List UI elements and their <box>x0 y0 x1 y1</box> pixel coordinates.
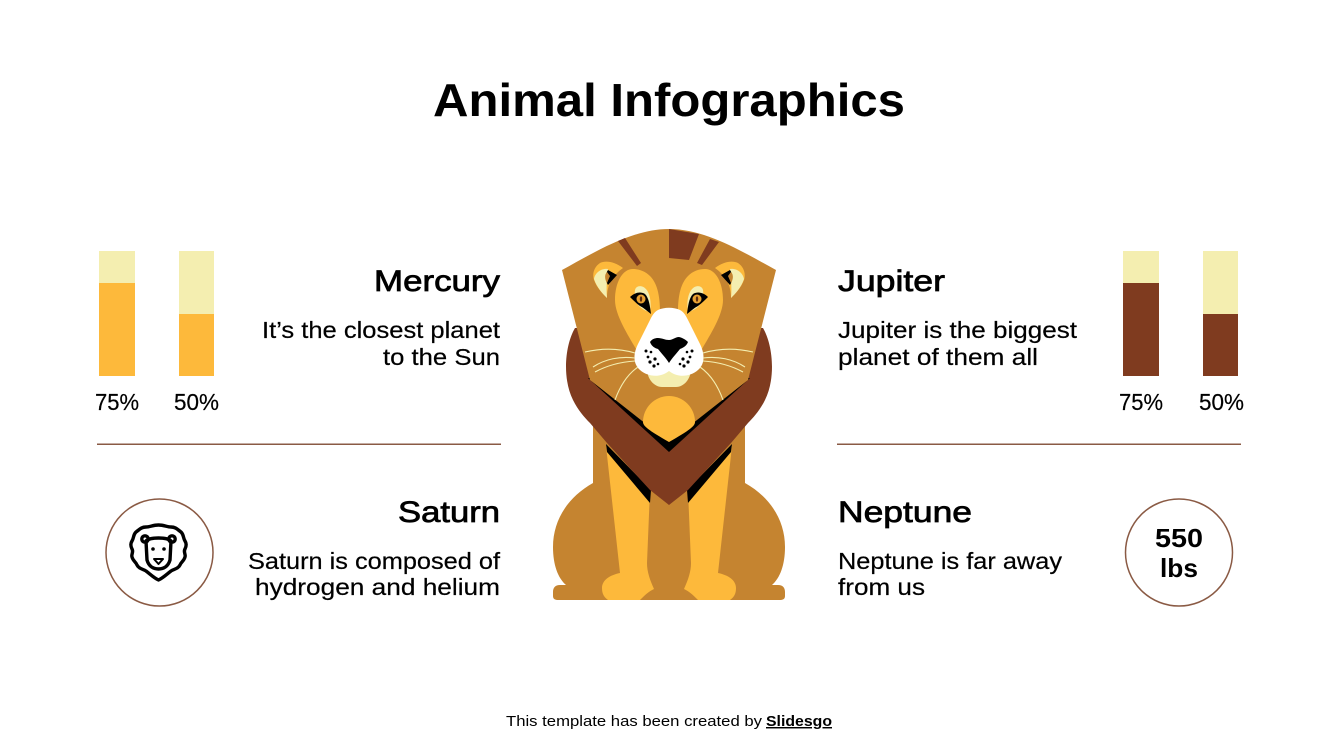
panel: neptune text: Neptune <box>838 496 972 529</box>
panel: neptune weight circle <box>1126 499 1232 606</box>
nose <box>650 337 688 363</box>
icon: lion head outline <box>131 525 186 580</box>
panel: neptune text: Neptune is far away <box>838 548 1063 574</box>
panel: mercury text: to the Sun <box>383 344 500 370</box>
chin <box>647 366 691 387</box>
panel: neptune text <box>838 496 1063 600</box>
right leg <box>684 446 736 600</box>
panel: jupiter bar charts: 75% <box>1119 389 1163 415</box>
panel: neptune weight circle: lbs <box>1160 553 1198 583</box>
panel: mercury bar charts: 75% <box>95 389 139 415</box>
mane stripes <box>618 229 719 266</box>
eye patches <box>635 286 703 312</box>
footer credit: Slidesgo <box>766 714 832 730</box>
panel: neptune weight circle: 550 <box>1155 523 1203 553</box>
footer credit: This template has been created by <box>506 714 763 730</box>
panel: mercury bar charts <box>95 251 219 415</box>
left leg <box>602 446 654 600</box>
eyes <box>630 293 708 314</box>
head <box>562 229 776 442</box>
panel: jupiter text: planet of them all <box>838 344 1038 370</box>
eye masks <box>615 269 723 349</box>
panel: saturn text: Saturn <box>398 496 500 529</box>
panel: jupiter text: Jupiter <box>838 265 945 298</box>
icon: lion illustration <box>553 229 785 600</box>
panel: jupiter bar charts <box>1119 251 1244 415</box>
whisker spots <box>644 350 694 368</box>
panel: jupiter text <box>838 265 1078 370</box>
panel: mercury bar charts: 50% <box>174 389 219 415</box>
black shadows beside chest <box>606 444 732 503</box>
footer credit <box>506 714 832 730</box>
black collar <box>588 378 750 452</box>
panel: mercury text: Mercury <box>374 265 500 298</box>
title: Animal Infographics <box>433 74 905 126</box>
panel: neptune text: from us <box>838 574 925 600</box>
panel: saturn text <box>248 496 501 600</box>
panel: mercury text <box>262 265 501 370</box>
chest <box>643 396 695 442</box>
panel: saturn text: hydrogen and helium <box>255 574 500 600</box>
whiskers <box>585 349 753 400</box>
panel: saturn icon circle <box>106 499 213 606</box>
panel: saturn text: Saturn is composed of <box>248 548 501 574</box>
panel: jupiter text: Jupiter is the biggest <box>838 317 1078 343</box>
muzzle <box>634 308 704 376</box>
panel: mercury text: It’s the closest planet <box>262 317 501 343</box>
lion body <box>553 425 785 600</box>
mane <box>566 328 772 505</box>
panel: jupiter bar charts: 50% <box>1199 389 1244 415</box>
ears <box>593 262 745 298</box>
